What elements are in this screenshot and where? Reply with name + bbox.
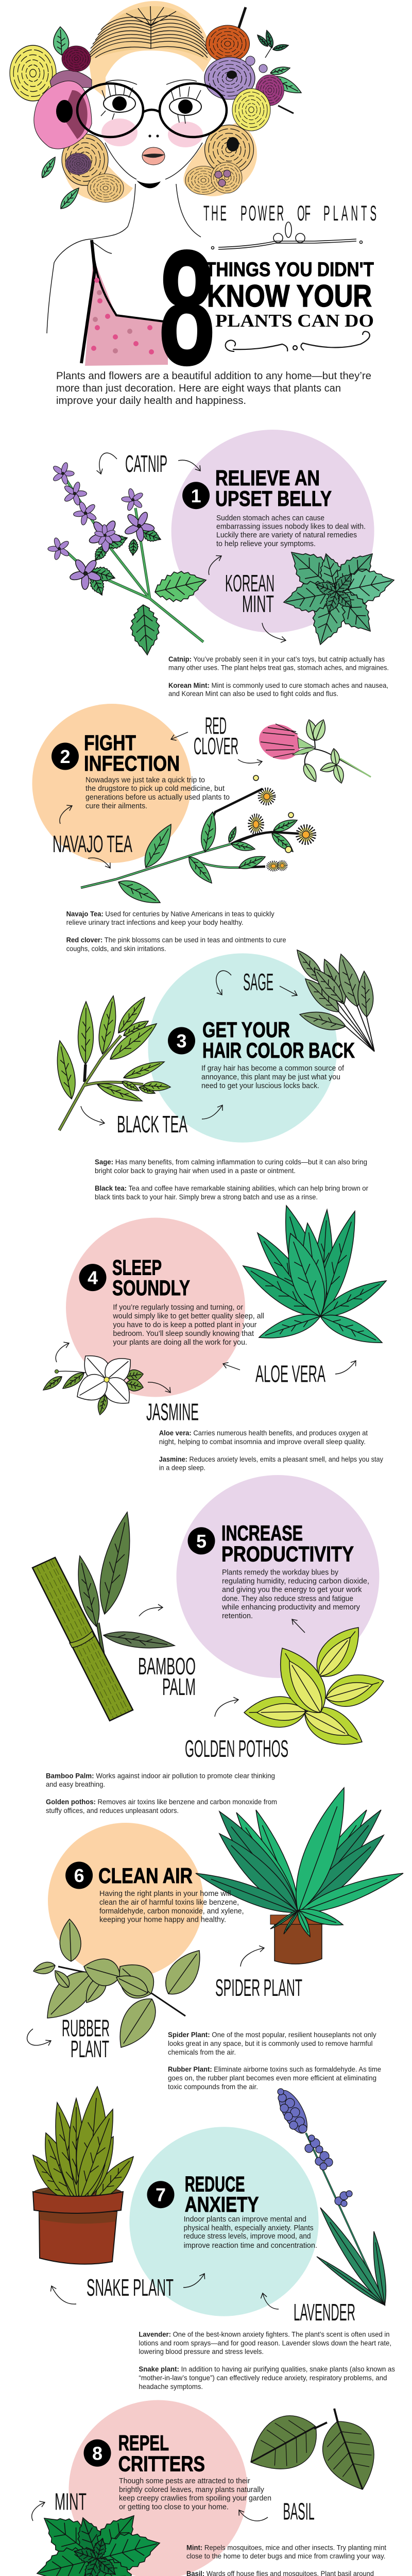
heading: CRITTERS xyxy=(118,2452,205,2476)
arrow xyxy=(148,1382,170,1393)
arrow xyxy=(171,732,188,739)
label: black tea: BLACK TEA xyxy=(117,1111,187,1138)
description: brightly colored leaves, many plants naturally xyxy=(119,2486,265,2494)
plant: aloe vera xyxy=(237,1201,390,1351)
background circle xyxy=(48,1823,203,1978)
hair curls xyxy=(62,122,257,202)
arrow xyxy=(99,453,117,474)
notes: Red clover: The pink blossoms can be used in teas and ointments to cure xyxy=(66,936,286,944)
number badge: 6 xyxy=(74,1865,84,1886)
number badge: 7 xyxy=(156,2184,166,2206)
background circle xyxy=(176,1475,379,1678)
notes: coughs, colds, and skin irritations. xyxy=(66,945,166,953)
number badge xyxy=(182,482,210,509)
arrow xyxy=(183,2274,204,2287)
arrow xyxy=(52,2286,76,2304)
description: Having the right plants in your home will xyxy=(99,1890,231,1898)
panel: 1 relieve an upset belly xyxy=(44,430,398,698)
arrow xyxy=(202,1105,222,1119)
number badge xyxy=(52,743,79,770)
arrow xyxy=(241,1948,264,1967)
description: bedroom. You’ll sleep soundly knowing that xyxy=(113,1330,254,1338)
arrow xyxy=(178,460,200,471)
panel: 6 clean air: RUBBER xyxy=(62,2014,110,2041)
description: retention. xyxy=(222,1612,253,1620)
plant: black tea xyxy=(52,994,170,1130)
number badge xyxy=(79,1264,106,1291)
heading xyxy=(215,466,332,511)
label: korean mint: MINT xyxy=(242,590,274,617)
label: golden pothos: GOLDEN POTHOS xyxy=(185,1735,288,1762)
plant: catnip xyxy=(44,462,210,656)
arrow xyxy=(223,1364,240,1370)
description: clean the air of harmful toxins like benzene, xyxy=(99,1899,239,1907)
heading: INFECTION xyxy=(84,751,180,775)
panel: 2 fight infection: CLOVER xyxy=(194,733,238,759)
description: If gray hair has become a common source of xyxy=(201,1064,345,1073)
arrow xyxy=(216,971,231,995)
description: Nowadays we just take a quick trip to xyxy=(85,776,205,784)
notes: “mother-in-law’s tongue”) can effectively reduce anxiety, respiratory problems, and xyxy=(139,2374,387,2382)
description xyxy=(216,514,366,548)
header: illustration of woman with flowers xyxy=(10,1,304,366)
arrow xyxy=(263,2293,279,2309)
hair wash xyxy=(89,1,212,98)
arrow xyxy=(139,1607,163,1616)
notes xyxy=(46,1772,277,1815)
heading xyxy=(221,1521,354,1566)
plant: spider plant xyxy=(193,1783,406,1964)
title: the power of plants: THE xyxy=(203,201,227,225)
notes xyxy=(159,1429,383,1472)
arrow xyxy=(280,986,297,995)
description: Luckily there are variety of natural remedies xyxy=(216,531,357,539)
intro text: more than just decoration. Here are eight ways that plants can xyxy=(56,383,341,394)
plant: jasmine xyxy=(41,1348,145,1416)
heading: SOUNDLY xyxy=(112,1276,190,1300)
number badge xyxy=(187,1527,215,1554)
label: rubber plant xyxy=(62,2014,110,2062)
plant: rubber plant xyxy=(32,1919,210,2055)
notes: lotions and room sprays—and for good reason. Lavender slows down the heart rate, xyxy=(139,2339,391,2347)
plant: golden pothos xyxy=(244,1618,388,1756)
description: Sudden stomach aches can cause xyxy=(216,514,324,522)
notes xyxy=(139,2331,395,2391)
number badge: 5 xyxy=(196,1531,207,1552)
panel: 8 repel critters: BASIL xyxy=(283,2498,315,2525)
description: improve reaction time and concentration. xyxy=(184,2242,317,2250)
notes: Golden pothos: Removes air toxins like benzene and carbon monoxide from xyxy=(46,1798,277,1806)
label: navajo tea: NAVAJO TEA xyxy=(53,831,132,857)
notes: and Korean Mint can also be used to fight colds and flus. xyxy=(168,690,338,698)
heading: GET YOUR xyxy=(202,1018,290,1042)
arrow xyxy=(81,1106,105,1123)
description xyxy=(184,2215,317,2250)
notes: Mint: Repels mosquitoes, mice and other insects. Try planting mint xyxy=(186,2544,386,2551)
notes: Aloe vera: Carries numerous health benefits, and produces oxygen at xyxy=(159,1429,368,1437)
panel: 1 relieve an upset belly: KOREAN xyxy=(225,570,274,597)
label: red clover: RED xyxy=(205,712,227,739)
title: the power of plants: PLANTS xyxy=(323,201,376,225)
notes: many other uses. The plant helps treat gas, stomach aches, and migraines. xyxy=(168,664,389,672)
title: the power of plants: POWER xyxy=(241,201,284,225)
notes: goes on, the rubber plant becomes even more efficient at eliminating xyxy=(168,2074,376,2082)
plant: sage xyxy=(292,946,374,1052)
label: korean mint xyxy=(225,570,274,617)
description: physical health, especially anxiety. Plants xyxy=(184,2224,314,2232)
notes: headache symptoms. xyxy=(139,2383,203,2391)
heading xyxy=(202,1018,355,1062)
notes xyxy=(186,2544,386,2576)
notes: black tints back to your hair. Simply brew a strong batch and use as a rinse. xyxy=(95,1193,318,1201)
title: the power of plants: OF xyxy=(297,201,311,225)
description: to help relieve your symptoms. xyxy=(216,540,316,548)
label: bamboo palm: PALM xyxy=(162,1673,196,1700)
label: bamboo palm: BAMBOO xyxy=(138,1653,196,1680)
notes xyxy=(66,910,286,953)
description: formaldehyde, carbon monoxide, and xylene, xyxy=(99,1907,244,1916)
description: cure their ailments. xyxy=(85,802,147,810)
panel: 3 get your hair color back: SAGE xyxy=(243,969,273,995)
panel: 4 sleep soundly xyxy=(41,1201,390,1472)
heading: CLEAN AIR xyxy=(98,1863,193,1888)
background circle xyxy=(66,1218,245,1397)
description: annoyance, this plant may be just what you xyxy=(201,1073,340,1081)
arrow xyxy=(292,1619,305,1633)
intro text: Plants and flowers are a beautiful addition to any home—but they’re xyxy=(56,370,371,382)
heading xyxy=(112,1255,190,1300)
description: Though some pests are attracted to their xyxy=(119,2477,250,2485)
heading: INCREASE xyxy=(221,1521,303,1545)
description: Plants remedy the workday blues by xyxy=(222,1569,339,1577)
left flowers xyxy=(10,26,92,212)
arrow xyxy=(88,858,110,868)
notes: stuffy offices, and reduces unpleasant odors. xyxy=(46,1807,179,1815)
dress xyxy=(81,240,168,366)
right flowers xyxy=(204,7,304,131)
description: the drugstore to pick up cold medicine, but xyxy=(85,785,225,793)
notes: Navajo Tea: Used for centuries by Native Americans in teas to quickly xyxy=(66,910,274,918)
heading: REDUCE xyxy=(185,2172,245,2196)
heading: HAIR COLOR BACK xyxy=(202,1038,355,1062)
number badge xyxy=(65,1862,93,1889)
title: plants can do: PLANTS CAN DO xyxy=(215,311,374,331)
label: aloe vera: ALOE VERA xyxy=(255,1361,325,1387)
plant: navajo tea xyxy=(81,775,313,909)
arrow xyxy=(239,2510,268,2521)
background circle xyxy=(148,953,337,1143)
description: and giving you the energy to get your work xyxy=(222,1586,362,1594)
description xyxy=(201,1064,345,1090)
heading: RELIEVE AN xyxy=(215,466,320,490)
notes: bright color back to graying hair when used in a paste or ointment. xyxy=(95,1167,296,1175)
heading: PRODUCTIVITY xyxy=(221,1542,354,1566)
arrow xyxy=(56,1343,69,1362)
heading: SLEEP xyxy=(112,1255,162,1280)
panel: 2 fight infection xyxy=(32,704,371,953)
label: red clover xyxy=(194,712,238,759)
plant: lavender xyxy=(273,2086,390,2309)
notes: Bamboo Palm: Works against indoor air pollution to promote clear thinking xyxy=(46,1772,275,1780)
number badge: 1 xyxy=(191,485,201,506)
notes: close to the home to deter bugs and mice from crawling your way. xyxy=(186,2552,385,2560)
description: keeping your home happy and healthy. xyxy=(99,1916,226,1924)
notes: lowering blood pressure and stress levels. xyxy=(139,2348,264,2355)
description: while enhancing productivity and memory xyxy=(221,1603,360,1612)
label: mint: MINT xyxy=(55,2488,87,2515)
heading: REPEL xyxy=(118,2431,169,2455)
plant: snake plant xyxy=(26,2086,140,2264)
arrow xyxy=(60,806,72,824)
arrow xyxy=(32,2502,45,2521)
plant: basil xyxy=(238,2404,386,2498)
intro text: improve your daily health and happiness. xyxy=(56,395,246,406)
notes: Black tea: Tea and coffee have remarkable staining abilities, which can help bring brown or xyxy=(95,1184,368,1192)
description xyxy=(112,1303,264,1347)
description: would simply like to get better quality sleep, all xyxy=(112,1312,264,1320)
description xyxy=(85,776,230,810)
panel: 5 increase productivity xyxy=(32,1475,388,1815)
notes xyxy=(168,655,389,698)
heading xyxy=(84,731,180,775)
notes: relieve urinary tract infections and keep your body healthy. xyxy=(66,919,244,926)
heading: UPSET BELLY xyxy=(215,486,332,511)
plant: mint xyxy=(32,2503,164,2576)
label: spider plant: SPIDER PLANT xyxy=(215,1974,302,2001)
panel: 1 relieve an upset belly: CATNIP xyxy=(125,450,167,477)
description: regulating humidity, reducing carbon dioxide, xyxy=(222,1578,369,1586)
notes: Jasmine: Reduces anxiety levels, emits a pleasant smell, and helps you stay xyxy=(159,1455,383,1463)
heading xyxy=(118,2431,205,2476)
description: If you’re regularly tossing and turning, or xyxy=(113,1303,243,1312)
number badge xyxy=(168,1027,195,1054)
notes: Snake plant: In addition to having air purifying qualities, snake plants (also known as xyxy=(139,2365,395,2373)
top hair xyxy=(88,6,208,61)
heading: FIGHT xyxy=(84,731,136,755)
background circle xyxy=(171,430,374,633)
label: bamboo palm xyxy=(138,1653,196,1700)
notes: Catnip: You’ve probably seen it in your cat’s toys, but catnip actually has xyxy=(168,655,385,663)
background circle xyxy=(32,704,192,863)
description: your plants are doing all the work for you. xyxy=(113,1338,247,1347)
notes: and easy breathing. xyxy=(46,1781,105,1788)
notes: night, helping to combat insomnia and improve overall sleep quality. xyxy=(159,1438,366,1446)
intro text xyxy=(56,370,371,406)
plant: red clover xyxy=(254,718,371,784)
description: or getting too close to your home. xyxy=(119,2503,229,2511)
panel: 3 get your hair color back xyxy=(52,946,374,1201)
ornament: flourish xyxy=(211,222,363,249)
notes: chemicals from the air. xyxy=(168,2048,236,2056)
description xyxy=(221,1569,369,1620)
notes xyxy=(168,2031,381,2091)
number badge: 3 xyxy=(176,1030,187,1052)
number badge: 4 xyxy=(88,1267,98,1289)
panel: 8 repel critters xyxy=(32,2400,386,2576)
heading xyxy=(185,2172,259,2216)
big numeral 8: 8 xyxy=(159,216,215,400)
description: reduce stress levels, improve mood, and xyxy=(184,2232,311,2241)
notes: Spider Plant: One of the most popular, resilient houseplants not only xyxy=(168,2031,376,2039)
description: generations before us actually used plants to xyxy=(85,793,230,802)
description xyxy=(99,1890,244,1924)
notes: looks great in any space, but it is commonly used to remove harmful xyxy=(168,2040,373,2047)
label: jasmine: JASMINE xyxy=(146,1399,199,1426)
label: rubber plant: PLANT xyxy=(71,2036,109,2062)
arrow xyxy=(215,1700,238,1717)
description: embarrassing issues nobody likes to deal with. xyxy=(216,522,366,531)
number badge xyxy=(83,2439,111,2467)
title: the power of plants xyxy=(203,201,376,225)
arrow xyxy=(238,759,262,763)
number badge xyxy=(147,2181,174,2208)
title group xyxy=(159,201,376,400)
notes: Korean Mint: Mint is commonly used to cure stomach aches and nausea, xyxy=(168,682,388,689)
arrow xyxy=(27,2029,51,2045)
description xyxy=(119,2477,271,2511)
description: keep creepy crawlies from spoiling your garden xyxy=(119,2495,271,2503)
description: you have to do is keep a potted plant in your xyxy=(113,1321,257,1329)
notes: toxic compounds from the air. xyxy=(168,2083,258,2091)
arrow xyxy=(335,1361,356,1374)
face xyxy=(101,80,203,188)
body outline xyxy=(47,184,201,333)
title: know your: KNOW YOUR xyxy=(207,279,372,313)
plant: korean mint xyxy=(280,539,398,649)
glasses xyxy=(77,83,227,137)
number badge: 2 xyxy=(60,746,71,767)
description: Indoor plants can improve mental and xyxy=(184,2215,306,2224)
panel: 6 clean air xyxy=(27,1783,406,2091)
description: need to get your luscious locks back. xyxy=(201,1082,319,1090)
arrow xyxy=(209,556,221,575)
description: done. They also reduce stress and fatigue xyxy=(222,1595,353,1603)
background circle xyxy=(69,2400,247,2576)
notes xyxy=(95,1158,368,1201)
notes: in a deep sleep. xyxy=(159,1464,205,1472)
notes: Lavender: One of the best-known anxiety fighters. The plant’s scent is often used in xyxy=(139,2331,390,2338)
notes: Rubber Plant: Eliminate airborne toxins such as formaldehyde. As time xyxy=(168,2065,381,2073)
background circle xyxy=(129,2127,319,2316)
label: snake plant: SNAKE PLANT xyxy=(87,2274,174,2301)
notes: Sage: Has many benefits, from calming inflammation to curing colds—but it can also bring xyxy=(95,1158,367,1166)
heading: ANXIETY xyxy=(185,2192,259,2216)
panel: 7 reduce anxiety xyxy=(26,2086,395,2391)
ornament: swirl flourish xyxy=(226,331,370,351)
number badge: 8 xyxy=(92,2443,102,2464)
title: things you didn't: THINGS YOU DIDN'T xyxy=(205,259,374,281)
plant: bamboo palm xyxy=(32,1510,176,1721)
arrow xyxy=(262,623,286,640)
